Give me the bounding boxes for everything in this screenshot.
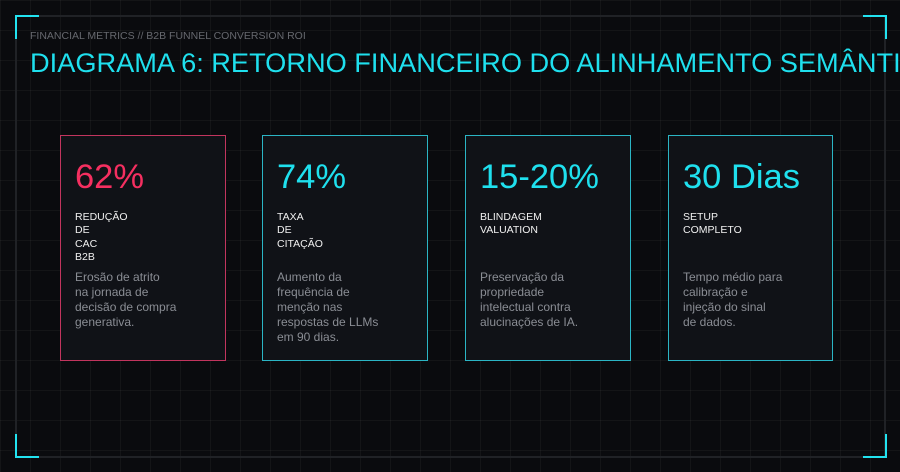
eyebrow text: FINANCIAL METRICS // B2B FUNNEL CONVERSION ROI bbox=[30, 30, 306, 42]
corner bracket: bottom right bbox=[863, 434, 887, 458]
description: Erosão de atrito bbox=[75, 270, 160, 284]
metric label bbox=[683, 211, 742, 236]
metric value: 62% bbox=[75, 158, 144, 196]
description: Tempo médio para bbox=[683, 270, 782, 284]
description: Preservação da bbox=[480, 270, 564, 284]
description: propriedade bbox=[480, 285, 544, 299]
description: injeção do sinal bbox=[683, 300, 766, 314]
metric label: SETUP bbox=[683, 211, 718, 223]
metric value: 74% bbox=[277, 158, 346, 196]
metric label: B2B bbox=[75, 251, 95, 263]
corner bracket: bottom left bbox=[15, 434, 39, 458]
metric label: REDUÇÃO bbox=[75, 211, 128, 223]
description: Aumento da bbox=[277, 270, 342, 284]
metric label bbox=[277, 211, 323, 250]
metric label: DE bbox=[277, 224, 292, 236]
description: frequência de bbox=[277, 285, 350, 299]
description: decisão de compra bbox=[75, 300, 176, 314]
metric value: 15-20% bbox=[480, 158, 599, 196]
description bbox=[75, 270, 176, 329]
description: intelectual contra bbox=[480, 300, 571, 314]
metric label bbox=[480, 211, 542, 236]
description: generativa. bbox=[75, 315, 134, 329]
metric label: CAC bbox=[75, 238, 97, 250]
metric label: TAXA bbox=[277, 211, 304, 223]
metric label: COMPLETO bbox=[683, 224, 742, 236]
description bbox=[683, 270, 782, 329]
description: na jornada de bbox=[75, 285, 148, 299]
corner bracket: top right bbox=[863, 15, 887, 39]
metric label: BLINDAGEM bbox=[480, 211, 542, 223]
description: menção nas bbox=[277, 300, 342, 314]
panel: 15-20% bbox=[465, 135, 631, 361]
panel: 30 Dias bbox=[668, 135, 833, 361]
corner bracket: top left bbox=[15, 15, 39, 39]
description bbox=[277, 270, 378, 344]
metric label: CITAÇÃO bbox=[277, 238, 323, 250]
description: de dados. bbox=[683, 315, 736, 329]
metric value: 30 Dias bbox=[683, 158, 800, 196]
panel: 74% bbox=[262, 135, 428, 361]
description: em 90 dias. bbox=[277, 330, 339, 344]
panel: 62% bbox=[60, 135, 226, 361]
metric label: DE bbox=[75, 224, 90, 236]
description: respostas de LLMs bbox=[277, 315, 378, 329]
metric label: VALUATION bbox=[480, 224, 538, 236]
description bbox=[480, 270, 578, 329]
metric label bbox=[75, 210, 128, 263]
description: alucinações de IA. bbox=[480, 315, 578, 329]
description: calibração e bbox=[683, 285, 748, 299]
